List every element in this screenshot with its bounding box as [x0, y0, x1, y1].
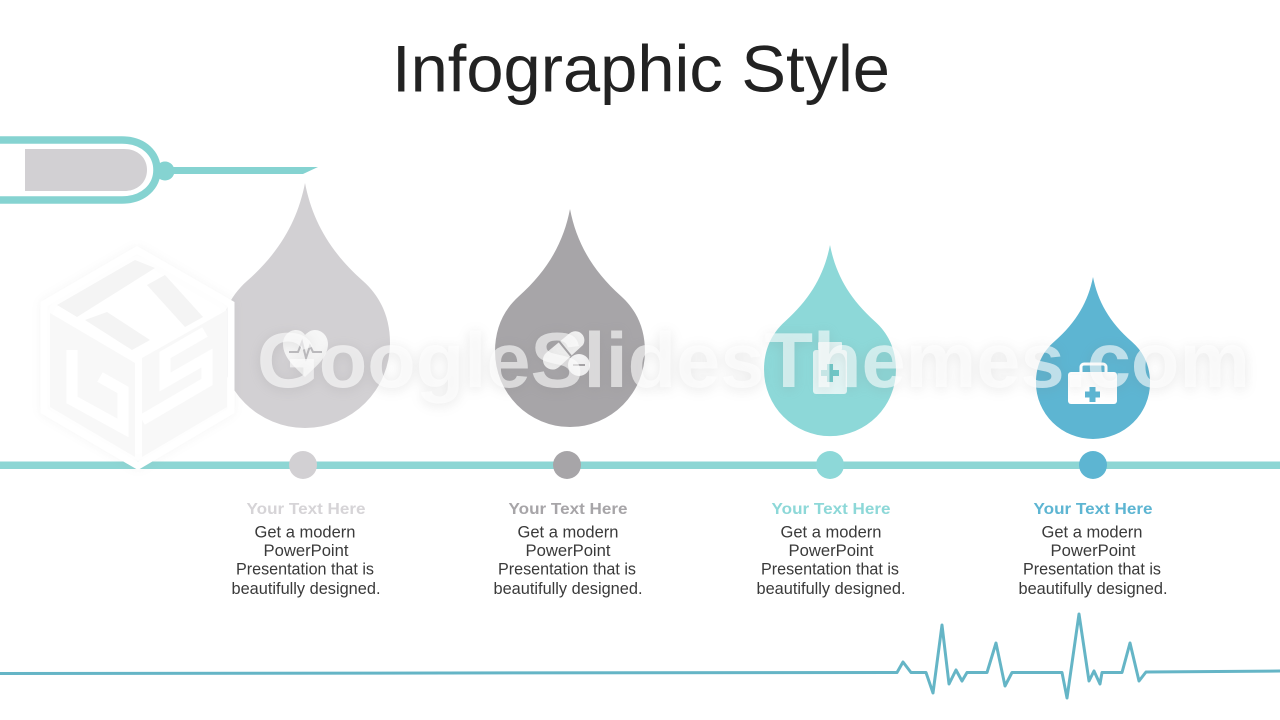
- icon: heart with pulse: [283, 330, 328, 377]
- step 3 text: Presentation that is: [761, 560, 899, 578]
- cube top panels: [57, 260, 203, 350]
- step 3 text: Get a modern: [780, 524, 882, 542]
- timeline marker 1: [289, 451, 317, 479]
- timeline line: [0, 462, 1280, 469]
- step 1: drop: [220, 183, 390, 428]
- step 4 text: PowerPoint: [1050, 542, 1136, 560]
- step 1 text: beautifully designed.: [232, 580, 380, 598]
- syringe needle: [165, 167, 318, 174]
- syringe plunger: [25, 149, 147, 191]
- syringe: [0, 140, 318, 200]
- step 4 text: Presentation that is: [1023, 560, 1161, 578]
- step 2: drop: [495, 209, 645, 427]
- watermark cube logo: [44, 250, 231, 466]
- step 1 text: Presentation that is: [236, 560, 374, 578]
- timeline marker 2: [553, 451, 581, 479]
- step 4 text: Get a modern: [1042, 524, 1142, 542]
- watermark text: GoogleSlidesThemes.com: [257, 318, 1250, 406]
- step 1 text: Your Text Here: [246, 501, 366, 518]
- timeline marker 4: [1079, 451, 1107, 479]
- cube letter S: [142, 332, 207, 420]
- step 2 text: beautifully designed.: [494, 580, 642, 598]
- icon: medicine bottle: [813, 342, 847, 394]
- icon: first aid kit: [1068, 364, 1117, 404]
- step 3: drop: [764, 245, 896, 436]
- step 1 text: Get a modern: [254, 524, 356, 542]
- step 2 text: Presentation that is: [498, 560, 636, 578]
- timeline marker 3: [816, 451, 844, 479]
- step 4 text: Your Text Here: [1034, 501, 1153, 518]
- step 3 text: [756, 501, 906, 598]
- cube right face: [142, 310, 227, 457]
- icon: pills: [543, 331, 590, 376]
- step 3 text: beautifully designed.: [756, 580, 906, 598]
- step 4 text: beautifully designed.: [1018, 580, 1168, 598]
- step 4: drop: [1036, 277, 1150, 439]
- cube left face: [50, 313, 135, 457]
- step 2 text: PowerPoint: [526, 542, 611, 560]
- title: Infographic Style: [392, 32, 890, 106]
- step 3 text: Your Text Here: [772, 501, 891, 518]
- cube letter G: [72, 350, 123, 428]
- watermark text: GoogleSlidesThemes.com: [257, 316, 1250, 404]
- step 2 text: Get a modern: [518, 524, 618, 542]
- ECG line: [0, 614, 1280, 698]
- step 2 text: [494, 501, 642, 598]
- step 1 text: [232, 501, 380, 598]
- step 4 text: [1018, 501, 1168, 598]
- syringe nozzle: [156, 162, 174, 180]
- step 2 text: Your Text Here: [508, 501, 628, 518]
- step 1 text: PowerPoint: [264, 542, 349, 560]
- syringe barrel: [0, 140, 157, 200]
- step 3 text: PowerPoint: [788, 542, 874, 560]
